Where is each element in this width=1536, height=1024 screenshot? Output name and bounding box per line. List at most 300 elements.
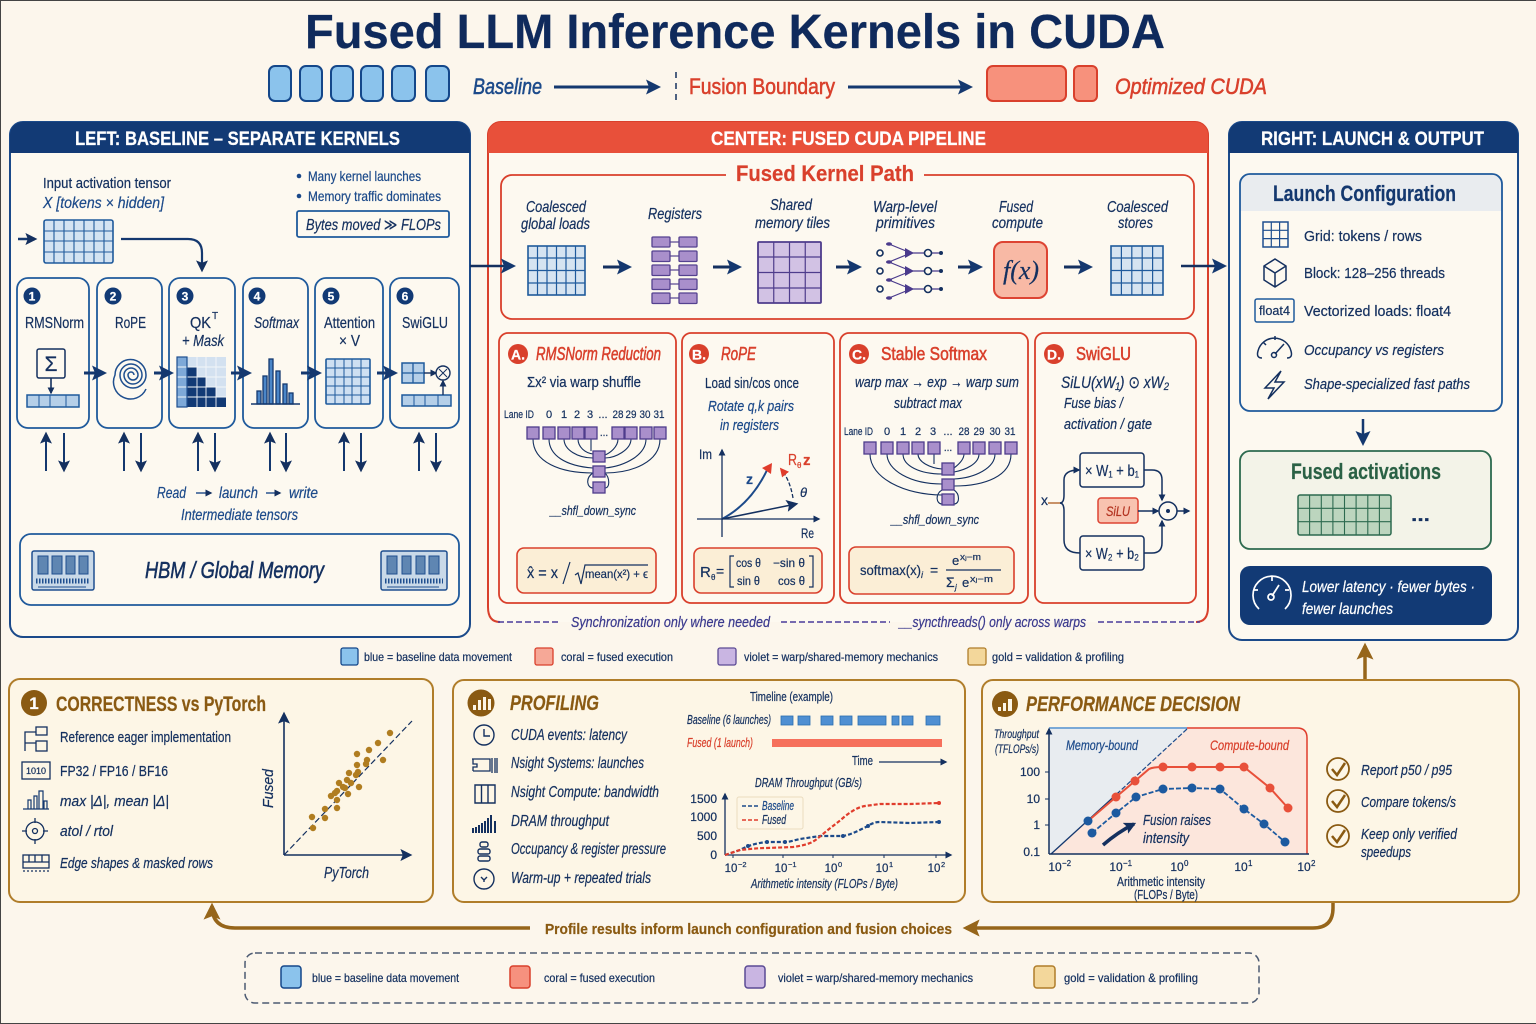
outcome banner: Lower latency · fewer bytes ·	[1302, 579, 1475, 596]
color legend (upper): blue = baseline data movement	[364, 650, 513, 664]
fast paths label: Shape-specialized fast paths	[1304, 376, 1470, 393]
chart: throughput vs intensity: 10	[1170, 860, 1184, 874]
fused activations box: Fused activations	[1291, 459, 1441, 484]
feedback caption: Profile results inform launch configuration and fusion choices	[545, 921, 952, 938]
formula B: =	[716, 563, 724, 579]
lane shuffle diagram: 3	[587, 409, 593, 421]
sub-panel D: SwiGLU: activation / gate	[1064, 416, 1152, 433]
reference label: Reference eager implementation	[60, 729, 231, 746]
sub-panel B: RoPE: RoPE	[721, 344, 757, 364]
step: registers	[648, 206, 702, 304]
lane shuffle diagram: ...	[600, 428, 608, 439]
outcome banner	[1240, 566, 1492, 625]
formula A: x̂ = x	[527, 565, 558, 582]
line chart: DRAM throughput: Arithmetic intensity (FLOPs / Byte)	[750, 876, 898, 891]
sub-panel C: stable softmax	[840, 333, 1028, 603]
center panel header bar	[488, 122, 1208, 153]
arrow: performance decision to output	[1363, 646, 1367, 680]
lane shuffle diagram: 31	[1004, 426, 1016, 438]
sub-panel C: stable softmax: subtract max	[894, 395, 962, 412]
color legend (upper)	[341, 648, 1124, 665]
sub-panel C: stable softmax: warp max → exp → warp sum	[855, 374, 1019, 391]
kernel 3: QK transpose + mask: + Mask	[182, 333, 225, 350]
read launch write caption: write	[289, 485, 318, 502]
step: coalesced global loads: global loads	[521, 216, 590, 233]
synchronization note line: __syncthreads() only across warps	[897, 614, 1086, 631]
chart: throughput vs intensity: Memory-bound	[1066, 737, 1139, 753]
color legend (bottom)	[245, 953, 1259, 1003]
formula C: Σ	[946, 574, 955, 590]
lane shuffle diagram: 2	[915, 426, 921, 438]
kernel 4: Softmax: Softmax	[254, 315, 300, 332]
DRAM label: DRAM throughput	[511, 813, 610, 830]
lane shuffle diagram: 30	[990, 426, 1000, 438]
kernel 1: RMSNorm	[17, 278, 89, 428]
chart: throughput vs intensity: Compute-bound	[1210, 737, 1290, 753]
chart: throughput vs intensity: 10	[1048, 860, 1062, 874]
optimized label: Optimized CUDA	[1115, 74, 1267, 99]
lane shuffle diagram: 1	[900, 426, 906, 438]
icon: binary box	[22, 762, 50, 779]
synchronization note line: Synchronization only where needed	[571, 614, 771, 631]
fused activations box	[1240, 451, 1491, 549]
color legend (upper): violet = warp/shared-memory mechanics	[744, 650, 938, 664]
color legend (upper): coral = fused execution	[561, 650, 673, 664]
formula C: xⱼ−m	[970, 574, 993, 584]
chart: throughput vs intensity: 10	[1234, 860, 1248, 874]
kernel 1: RMSNorm: RMSNorm	[25, 315, 84, 332]
lane shuffle diagram: 0	[546, 409, 552, 421]
step: coalesced stores: stores	[1118, 215, 1153, 232]
line chart: DRAM throughput: 10	[725, 863, 737, 875]
formula C: softmax(x)	[860, 562, 921, 578]
check: report percentiles	[1327, 758, 1453, 780]
Nsight systems label: Nsight Systems: launches	[511, 755, 644, 772]
lane shuffle diagram	[844, 426, 1017, 527]
line chart: DRAM throughput: 0	[710, 848, 717, 862]
edge shapes label: Edge shapes & masked rows	[60, 855, 213, 872]
lane shuffle diagram: 0	[884, 426, 890, 438]
line chart: DRAM throughput: 10	[775, 863, 787, 875]
icon: float4 tag	[1255, 299, 1294, 322]
line chart: DRAM throughput: 500	[697, 829, 717, 843]
chart: throughput vs intensity: (TFLOPs/s)	[995, 742, 1039, 756]
callout: bytes moved	[297, 211, 449, 237]
arrow into fused pipeline	[470, 265, 513, 267]
icon: clock	[474, 725, 494, 745]
lane shuffle diagram: 2	[574, 409, 580, 421]
kernel 1: RMSNorm: Σ	[45, 353, 58, 376]
chart: throughput vs intensity	[994, 727, 1316, 902]
input tensor label	[42, 175, 171, 212]
fused activations box: ...	[1411, 505, 1430, 525]
correctness number badge	[21, 690, 47, 716]
fusion boundary dashed line	[675, 72, 677, 100]
step: fused compute: f(x)	[1003, 256, 1039, 285]
scatter plot: fused vs PyTorch	[260, 714, 412, 882]
output tensor grid	[1298, 495, 1391, 535]
kernel 1: RMSNorm: 1	[29, 290, 36, 304]
color legend (bottom): blue = baseline data movement	[312, 971, 460, 985]
sub-panel D: SwiGLU: SwiGLU	[1076, 344, 1131, 364]
vectorized loads label: Vectorized loads: float4	[1304, 303, 1451, 320]
panel: right launch and output	[1229, 122, 1518, 640]
lane shuffle diagram: 1	[561, 409, 567, 421]
lane shuffle diagram: ...	[944, 443, 952, 454]
panel: center fused pipeline	[488, 122, 1208, 631]
timeline example: Timeline (example)	[750, 689, 833, 704]
launch configuration heading: Launch Configuration	[1273, 181, 1456, 206]
sub-panel C: stable softmax: Stable Softmax	[881, 344, 987, 364]
sub-panel B: RoPE: in registers	[720, 417, 779, 434]
rotation diagram: z	[746, 471, 753, 487]
chart: throughput vs intensity: Throughput	[994, 727, 1039, 741]
arrow to fused activations	[1362, 419, 1364, 443]
lane shuffle diagram: Lane ID	[504, 409, 534, 421]
check: keep verified	[1327, 825, 1458, 861]
chart: throughput vs intensity: 10	[1027, 792, 1040, 806]
icon: systems trace	[472, 758, 497, 773]
check: compare tokens: Compare tokens/s	[1361, 794, 1456, 811]
sub-panel C: stable softmax: C.	[852, 346, 866, 362]
check: keep verified: Keep only verified	[1361, 826, 1458, 843]
line chart: DRAM throughput: 10	[825, 863, 837, 875]
rotation diagram: z	[803, 452, 810, 469]
sub-panel D: SwiGLU: Fuse bias /	[1064, 395, 1124, 412]
memory chip left	[32, 551, 94, 590]
icon: reference flow	[25, 727, 47, 751]
line chart: DRAM throughput: 1000	[690, 810, 717, 824]
rotation diagram	[697, 446, 819, 541]
line chart: DRAM throughput: DRAM Throughput (GB/s)	[755, 775, 862, 790]
chart: throughput vs intensity: intensity	[1143, 830, 1190, 847]
sub-panel B: RoPE: Load sin/cos once	[705, 375, 799, 392]
arrow	[1064, 266, 1090, 268]
icon: occupancy gauge	[1258, 336, 1292, 358]
Nsight compute label: Nsight Compute: bandwidth	[511, 784, 659, 801]
feedback arrow: right segment	[966, 903, 1333, 928]
icon: occupancy stack	[478, 842, 490, 861]
CUDA events label: CUDA events: latency	[511, 727, 628, 744]
icon: compute panes	[475, 785, 495, 803]
kernel 2: RoPE: 2	[110, 290, 117, 304]
formula B: sin θ	[737, 574, 760, 588]
lane shuffle diagram: 3	[930, 426, 936, 438]
icon: lightning bolt	[1265, 371, 1284, 399]
step: registers: Registers	[648, 206, 702, 223]
icon: tolerance target	[22, 818, 48, 844]
read launch write caption: Read	[157, 485, 187, 502]
lane shuffle diagram: 28	[958, 426, 970, 438]
baseline label: Baseline	[473, 74, 542, 99]
lane shuffle diagram	[504, 409, 666, 518]
panel: profiling	[453, 680, 965, 902]
performance badge	[992, 691, 1018, 717]
line chart: DRAM throughput: 1500	[690, 792, 717, 806]
check: compare tokens	[1327, 790, 1456, 812]
right panel heading: RIGHT: LAUNCH & OUTPUT	[1261, 129, 1484, 150]
check: report percentiles: Report p50 / p95	[1361, 762, 1453, 779]
line chart: DRAM throughput: 10	[876, 863, 888, 875]
timeline example: Fused (1 launch)	[687, 736, 753, 750]
step: fused compute: compute	[992, 215, 1043, 232]
read launch write caption	[157, 485, 318, 502]
feedback loop arrow and caption	[212, 903, 1333, 938]
kernel 5: Attention x V: × V	[339, 333, 360, 350]
sub-panel B: RoPE: Rotate q,k pairs	[708, 398, 794, 415]
chart: throughput vs intensity: 1	[1033, 818, 1040, 832]
synchronization note line	[498, 614, 1200, 631]
kernel 4: Softmax: 4	[254, 290, 261, 304]
sub-panel D: SwiGLU	[1035, 333, 1196, 603]
kernel 2: RoPE: RoPE	[115, 315, 146, 332]
formula C: xⱼ−m	[960, 552, 981, 562]
sub-panel B: RoPE	[682, 333, 834, 603]
scatter plot: fused vs PyTorch: Fused	[260, 768, 277, 808]
center panel outline	[488, 122, 1208, 622]
kernel 6: SwiGLU: SwiGLU	[402, 315, 448, 332]
HBM global memory	[20, 534, 459, 605]
arrow into right panel	[1181, 265, 1224, 267]
step: fused compute	[992, 199, 1047, 298]
callout: bytes moved: Bytes moved ≫ FLOPs	[306, 217, 441, 234]
correctness number badge: 1	[29, 694, 39, 713]
timeline example: Time	[852, 753, 873, 768]
grid label: Grid: tokens / rows	[1304, 228, 1422, 245]
sub-panel A: RMSNorm reduction: RMSNorm Reduction	[536, 344, 661, 364]
formula C: j	[954, 583, 957, 592]
panel: correctness vs PyTorch	[9, 679, 433, 902]
formula C: e	[952, 553, 959, 568]
correctness heading: CORRECTNESS vs PyTorch	[56, 693, 266, 716]
kernel 5: Attention x V: Attention	[324, 315, 375, 332]
chart: throughput vs intensity: 10	[1109, 860, 1123, 874]
line chart: DRAM throughput: 10	[928, 863, 940, 875]
step: shared memory tiles: Shared	[770, 197, 813, 214]
kernel 3: QK transpose + mask	[169, 278, 235, 428]
step: warp-level primitives: Warp-level	[873, 199, 937, 216]
sub-panel D: SwiGLU: D.	[1047, 346, 1061, 362]
color legend (upper): gold = validation & profiling	[992, 650, 1124, 664]
step: coalesced stores	[1107, 199, 1169, 295]
rotation diagram: θ	[800, 485, 807, 500]
line chart: DRAM throughput: Fused	[762, 813, 787, 827]
chart: throughput vs intensity: 1	[1248, 859, 1253, 868]
memory chip right	[381, 551, 447, 590]
bullet notes: Many kernel launches	[308, 168, 421, 184]
lane shuffle diagram: 28	[612, 409, 624, 421]
chart: throughput vs intensity: 100	[1020, 765, 1040, 779]
icon: error bars	[23, 791, 49, 809]
bullet notes: Memory traffic dominates	[308, 188, 441, 204]
rotation diagram: θ	[797, 461, 802, 470]
rotation diagram: R	[788, 452, 797, 469]
chart: throughput vs intensity: Arithmetic intensity	[1117, 875, 1206, 889]
formula B: R	[700, 564, 711, 581]
line chart: DRAM throughput: −1	[788, 860, 797, 869]
sub-panel D: SwiGLU: SiLU(xW₁) ⊙ xW₂	[1061, 373, 1169, 392]
kernel 5: Attention x V: 5	[328, 290, 335, 304]
gated branch diagram: × W₂ + b₂	[1085, 546, 1139, 563]
center panel heading: CENTER: FUSED CUDA PIPELINE	[711, 129, 986, 150]
line chart: DRAM throughput	[690, 775, 951, 891]
color legend (bottom): gold = validation & profiling	[1064, 971, 1198, 985]
right panel header bar	[1229, 122, 1518, 153]
bullet notes	[297, 168, 441, 204]
scatter plot: fused vs PyTorch: PyTorch	[324, 865, 369, 882]
arrow	[603, 266, 629, 268]
lane shuffle diagram: 29	[626, 409, 636, 421]
arrow	[836, 266, 859, 268]
input tensor grid	[44, 220, 113, 263]
panel: left baseline	[10, 122, 470, 637]
lane shuffle diagram: __shfl_down_sync	[889, 512, 979, 527]
kernel 5: Attention x V	[315, 278, 383, 428]
performance heading: PERFORMANCE DECISION	[1026, 693, 1241, 716]
timeline example	[687, 689, 946, 768]
flow arrows between kernels	[84, 372, 395, 374]
occupancy label: Occupancy vs registers	[1304, 342, 1444, 359]
outcome banner: fewer launches	[1302, 601, 1393, 618]
step: coalesced global loads: Coalesced	[526, 199, 587, 216]
block label: Block: 128–256 threads	[1304, 265, 1445, 282]
fused kernel path box	[501, 161, 1194, 319]
lane shuffle diagram: __shfl_down_sync	[548, 503, 636, 518]
occupancy label: Occupancy & register pressure	[511, 841, 666, 858]
check: keep verified: speedups	[1361, 844, 1411, 861]
warm-up label: Warm-up + repeated trials	[511, 870, 651, 887]
arrow	[713, 266, 739, 268]
launch configuration box	[1240, 174, 1502, 411]
chart: throughput vs intensity: −2	[1062, 859, 1072, 868]
icon: warm-up dial	[474, 869, 494, 889]
header legend: baseline to optimized	[269, 66, 1267, 101]
error label: max |Δ|, mean |Δ|	[60, 793, 169, 810]
read launch write caption: launch	[219, 485, 258, 502]
icon: speedometer	[1253, 576, 1291, 609]
profiling badge	[468, 690, 494, 716]
formula A: mean(x²) + ϵ	[585, 567, 648, 581]
kernel 6: SwiGLU: 6	[402, 290, 409, 304]
formula C: i	[921, 570, 924, 580]
sub-panel A: RMSNorm reduction: A.	[511, 346, 525, 362]
step: shared memory tiles: memory tiles	[755, 215, 830, 232]
gated branch diagram: × W₁ + b₁	[1085, 463, 1139, 480]
gated branch diagram: SiLU	[1106, 503, 1131, 519]
intermediate tensors caption: Intermediate tensors	[181, 507, 298, 524]
step: coalesced global loads	[521, 199, 590, 295]
left panel header bar	[10, 122, 470, 153]
formula C	[849, 547, 1014, 594]
icon: grid	[1263, 222, 1288, 247]
icon: binary box: 1010	[26, 766, 46, 776]
step: shared memory tiles	[755, 197, 830, 303]
chart: throughput vs intensity: 2	[1311, 859, 1316, 868]
tolerance label: atol / rtol	[60, 823, 114, 840]
lane shuffle diagram: 30	[640, 409, 650, 421]
gated branch diagram	[1041, 453, 1189, 570]
fused kernel blocks	[987, 66, 1097, 101]
chart: throughput vs intensity: 10	[1297, 860, 1311, 874]
lane shuffle diagram: Lane ID	[844, 426, 873, 438]
lane shuffle diagram: ...	[943, 426, 953, 438]
line chart: DRAM throughput: 1	[889, 860, 893, 869]
arrow to QK box	[121, 239, 202, 270]
sub-panel A: RMSNorm reduction: Σx² via warp shuffle	[527, 374, 641, 391]
precision label: FP32 / FP16 / BF16	[60, 763, 168, 780]
read/write arrows to memory	[46, 433, 436, 471]
icon: throughput bars	[473, 815, 495, 833]
baseline kernel blocks	[269, 66, 449, 101]
icon: cube	[1264, 259, 1286, 287]
line chart: DRAM throughput: 2	[941, 860, 945, 869]
line chart: DRAM throughput: −2	[738, 860, 747, 869]
input arrow	[18, 238, 35, 240]
rotation diagram: Im	[699, 446, 712, 462]
formula B: cos θ	[778, 574, 805, 588]
formula B	[694, 548, 822, 593]
color legend (bottom): coral = fused execution	[544, 971, 655, 985]
chart: throughput vs intensity: Fusion raises	[1143, 812, 1211, 829]
formula B: cos θ	[736, 556, 761, 570]
line chart: DRAM throughput: Baseline	[762, 799, 794, 813]
panel: performance decision	[982, 680, 1519, 902]
sub-panel B: RoPE: B.	[692, 346, 706, 362]
step: warp-level primitives: primitives	[875, 215, 935, 232]
chart: throughput vs intensity: 0.1	[1023, 845, 1040, 859]
formula B: −sin θ	[773, 556, 805, 570]
icon: float4 tag: float4	[1259, 303, 1290, 318]
kernel 3: QK transpose + mask: T	[212, 311, 218, 322]
step: fused compute: Fused	[999, 199, 1034, 216]
HBM label: HBM / Global Memory	[145, 557, 325, 583]
input tensor label: X [tokens × hidden]	[42, 195, 164, 212]
left panel heading: LEFT: BASELINE – SEPARATE KERNELS	[75, 129, 400, 150]
kernel 3: QK transpose + mask: QK	[190, 315, 211, 332]
step: coalesced stores: Coalesced	[1107, 199, 1169, 216]
formula B: θ	[711, 573, 716, 582]
input tensor label: Input activation tensor	[43, 175, 171, 192]
formula C: e	[962, 575, 969, 590]
color legend (bottom): violet = warp/shared-memory mechanics	[778, 971, 973, 985]
lane shuffle diagram: 29	[974, 426, 984, 438]
fused kernel path heading: Fused Kernel Path	[736, 161, 914, 186]
icon: edge shapes	[23, 855, 49, 871]
arrow to optimized	[848, 86, 970, 88]
rotation diagram: Re	[801, 525, 814, 541]
lane shuffle diagram: ...	[598, 409, 608, 421]
sub-panel A: RMSNorm reduction	[499, 333, 676, 603]
line chart: DRAM throughput: 0	[838, 860, 842, 869]
fusion boundary label: Fusion Boundary	[689, 74, 835, 99]
title: Fused LLM Inference Kernels in CUDA	[305, 6, 1165, 59]
timeline example: Baseline (6 launches)	[687, 713, 771, 727]
chart: throughput vs intensity: −1	[1123, 859, 1133, 868]
chart: throughput vs intensity: 0	[1184, 859, 1189, 868]
step: warp-level primitives	[873, 199, 943, 300]
gated branch diagram: x	[1041, 492, 1048, 508]
kernel 2: RoPE	[97, 278, 162, 428]
kernel 4: Softmax	[243, 278, 308, 428]
lane shuffle diagram: 31	[654, 409, 664, 421]
kernel 6: SwiGLU	[390, 278, 459, 428]
arrow	[958, 266, 980, 268]
formula C: =	[930, 562, 938, 578]
arrow to boundary	[554, 86, 658, 88]
chart: throughput vs intensity: (FLOPs / Byte)	[1134, 888, 1198, 902]
profiling heading: PROFILING	[510, 692, 599, 715]
feedback arrow: left segment	[212, 906, 530, 928]
